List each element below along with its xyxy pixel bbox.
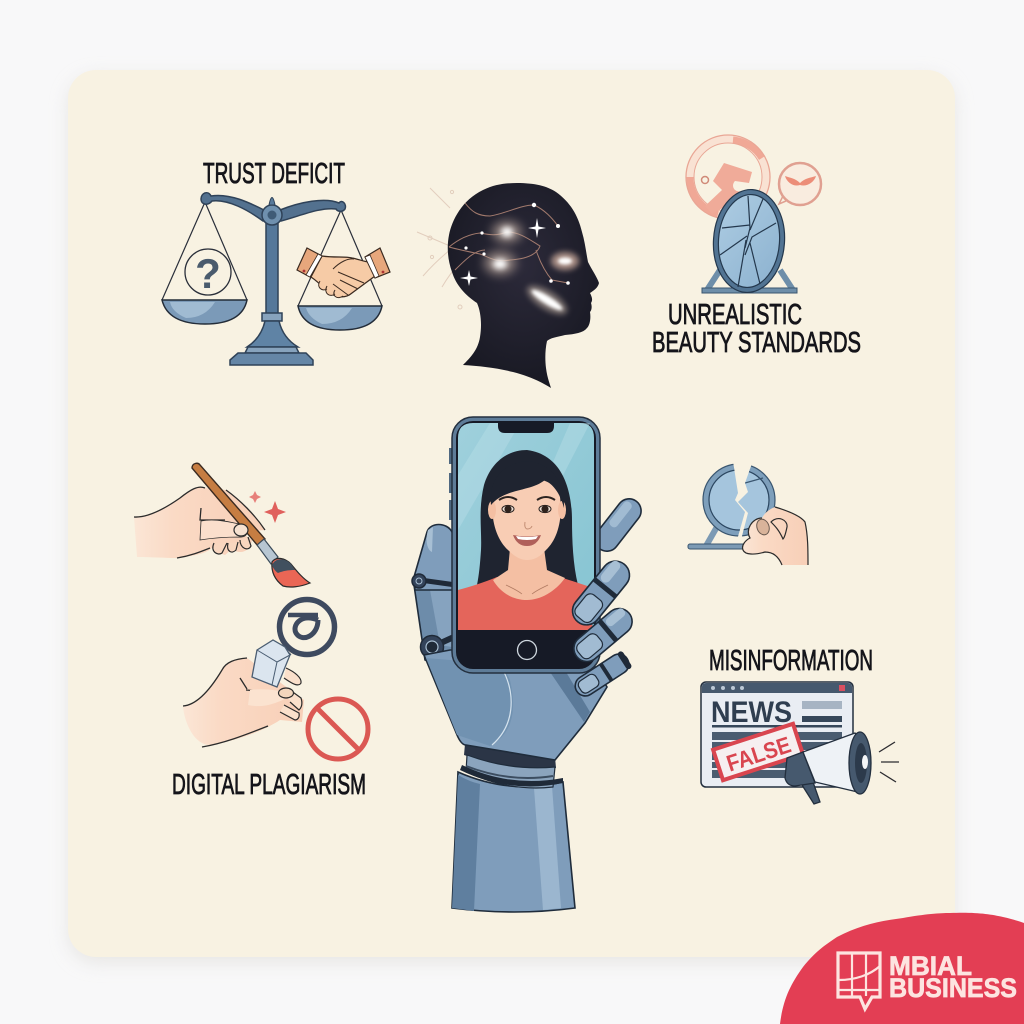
palm [424,650,607,760]
illustration: robot hand holding phone [412,417,646,912]
right pan with handshake [297,248,390,330]
heading: digital plagiarism: DIGITAL PLAGIARISM [172,769,366,801]
eyes and brows [499,497,555,513]
magnifying glass [280,600,334,660]
icon: balance scale [162,193,390,365]
brain network lines [449,203,568,283]
red sparkles [249,491,261,503]
thumb [412,524,470,680]
salmon ring and silhouette [686,135,770,219]
phone screen with portrait [458,422,594,630]
false stamp: FALSE [723,731,794,776]
hand gripping mirror [743,507,808,565]
glowing spots [460,203,579,320]
left pan with question mark [162,249,247,324]
panel: cream card [68,70,955,957]
logo wordmark: BUSINESS [889,973,1017,1003]
browser window: NEWS [711,696,792,729]
heading: unrealistic beauty standards [652,299,861,359]
forearm [452,744,575,912]
home button [518,640,536,660]
shirt [458,577,594,630]
phone [449,417,600,673]
heading: trust deficit: TRUST DEFICIT [203,158,345,190]
scale column and base [230,222,313,365]
neck and chest [493,548,565,600]
heading: misinformation: MISINFORMATION [709,645,873,677]
face [492,478,561,560]
fringe [491,461,564,508]
mirror stand and glass [707,270,793,290]
browser window [701,682,853,787]
megaphone [785,732,899,804]
icon: news window with false stamp and megaphone [701,682,899,804]
scale beam [201,193,345,221]
hand [183,658,304,745]
logo wordmark [889,951,1017,1003]
logo: red corner badge [780,913,1024,1024]
finger two [567,555,635,631]
icon: prohibition sign [308,699,368,759]
icon: mirror with beauty ring [686,135,821,295]
left pan with question mark: ? [195,250,221,297]
icon: hand with paintbrush [134,463,310,587]
logo wordmark: MBIAL [889,951,972,981]
eraser [252,640,290,687]
finger four [571,650,633,700]
logo mark [838,953,880,1009]
sound rays [879,742,899,782]
heading: unrealistic beauty standards: UNREALISTIC [668,299,802,331]
speech bubble [779,163,821,205]
finger three [569,603,637,667]
card shadow [68,76,955,963]
icon: glowing head silhouette [417,183,599,388]
heading: unrealistic beauty standards: BEAUTY STANDARDS [652,327,861,359]
faint network dots outside head [417,188,478,309]
icon: magnifier over eraser held in hand [183,600,334,747]
smile [513,535,541,546]
hair [477,450,578,585]
paintbrush [192,463,310,587]
icon: cracked mirror with hand [688,464,808,565]
index finger behind phone [590,494,646,556]
